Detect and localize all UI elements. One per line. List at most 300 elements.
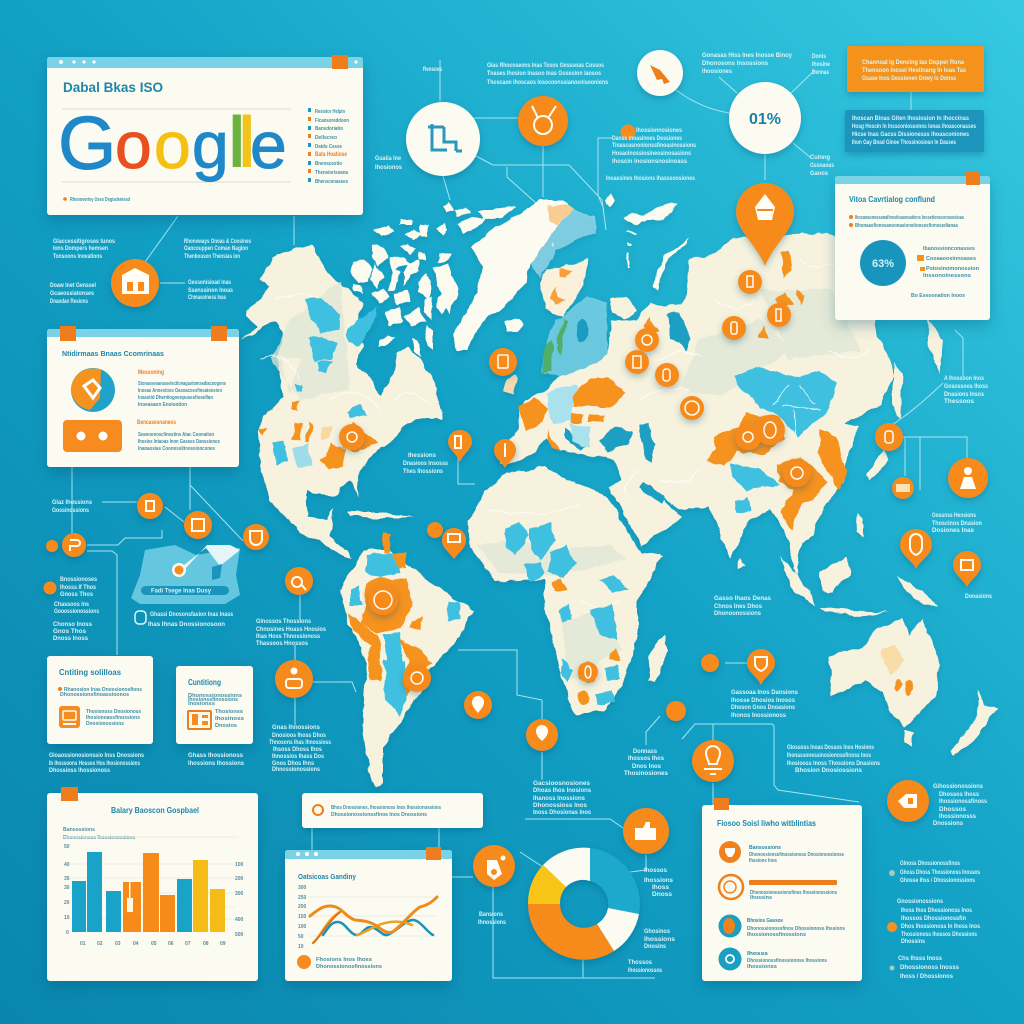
panel: bar chart: Dhonosionoss Ihossionossions: [63, 835, 135, 841]
land: iceland: [505, 319, 523, 332]
land: north america: [242, 245, 443, 560]
axis labels: 08: [203, 941, 209, 947]
text: map notes: Thosinosiones: [624, 771, 669, 777]
text: map notes: Thessoos: [944, 399, 975, 405]
panel: line chart: Fhosions Inos Ihoss: [316, 957, 372, 963]
text: below drop: [478, 912, 507, 926]
panel: right list: [702, 798, 862, 981]
text: left notes: Glaz Ihossions: [52, 500, 93, 506]
axis labels: 50: [64, 844, 70, 850]
text: donut notes: Ihossions: [644, 937, 676, 943]
text: map notes: Ihonassonessinosionossfinoss Inos: [787, 753, 872, 759]
callout: top of line chart: [302, 793, 483, 828]
text: upper left notes: Chmasoiness Inas: [188, 295, 226, 301]
summary text: Inosas Annestoos Oasoacossfinsatoosion: [138, 388, 222, 394]
green strips: [541, 318, 566, 372]
icon: white circle with arrow: [637, 50, 683, 96]
list item 1: Ihssions Inos: [749, 858, 777, 864]
side list: Datdo Cesse: [315, 144, 342, 150]
callout: teal notice: Ihoscan Binas Giten Ihosiosion In Ihoccinas: [852, 116, 970, 122]
axis labels: 09: [220, 941, 226, 947]
stat circle: [860, 240, 906, 286]
list item 3: Bhosios Gassos: [747, 918, 783, 924]
stat text: Bo Eseoonation Inoos: [911, 293, 965, 299]
connector lines: [72, 60, 967, 978]
translucent sea band: [540, 295, 607, 378]
text: donut notes: Thossos: [628, 960, 653, 966]
land: arabia: [609, 478, 682, 545]
land: greenland: [455, 200, 573, 350]
text: map notes: Gasso Ihaos Denas: [714, 596, 772, 602]
text: map notes: Dnos Inos: [632, 764, 662, 770]
text: below cards: Dhossioss Ihossionoss: [49, 768, 111, 774]
text: below cards: Gloaossionosionssio Inss Dnossions: [49, 753, 145, 759]
summary text: Inanaosias Coonossitinossioncones: [138, 446, 215, 452]
text: map notes: Ihossos Ihos: [628, 756, 665, 762]
panel title: Dabal Bkas ISO: [63, 79, 163, 95]
text: left notes: Dhnossionossions: [272, 767, 321, 773]
callout: teal notice: Hicse Inas Gacss Dissionesss Ihoasconiones: [852, 132, 970, 138]
side list: Bnenscestio: [315, 161, 342, 167]
text: map notes: Dhonoonossions: [714, 611, 762, 617]
text: bottom right notes: Ihossos Dhossionossfin: [901, 916, 966, 922]
stat text: Pstosinomonossion: [926, 266, 979, 272]
panel: small card one: Thosionoss Dnosionoss: [86, 709, 141, 715]
callout: teal notice: Ihon Gay Bnad Ginoe Thossinosiosn In Dasses: [852, 140, 957, 146]
text: upper left notes: Rhonoways Onoas & Coosines: [184, 239, 251, 245]
text: bottom right notes: [897, 784, 988, 980]
google logo: o: [115, 108, 152, 182]
panel: small card two: Dnosios: [215, 723, 237, 729]
list item 4: Ihosss: [747, 951, 768, 957]
arctic islands: [351, 202, 516, 356]
text: top notes: [375, 53, 835, 182]
text: map notes: Bhosion Dnosiossions: [795, 768, 863, 774]
icon: orange tablet: [59, 706, 80, 728]
text: donut notes: Ihossos: [644, 868, 668, 874]
badge: blue map card: [131, 545, 240, 604]
list item 4: [718, 948, 827, 970]
land: south america: [340, 550, 472, 790]
text: map notes: Chnos Ines Dhos: [714, 604, 763, 610]
summary text: Ihosiss Intaoas Inon Gasses Danssionos: [138, 439, 220, 445]
list item 4: Ihossionss: [747, 964, 777, 970]
summary text: Inoeasaon Ensiootion: [138, 402, 187, 408]
text: left notes: Chonso Inoss: [53, 622, 93, 628]
seas: [565, 313, 690, 503]
lines: [310, 897, 437, 943]
axis labels: 05: [151, 941, 157, 947]
bars: [72, 852, 225, 932]
text: below cards: Ihossions Ihossions: [188, 761, 245, 767]
south america regions: [350, 553, 460, 717]
text: left notes: Ihnossios Ihass Dos: [272, 754, 325, 760]
north russia islands: [552, 195, 690, 289]
panel: google: [47, 55, 363, 215]
text: bottom right notes: Chs Ihsss Inoss: [898, 956, 943, 962]
text: left notes: Gooossionossions: [54, 609, 100, 615]
text: below drop: Ihnossions: [478, 920, 507, 926]
text: upper left notes: Gessonisioad Inas: [188, 280, 232, 286]
list item 3: [718, 914, 845, 938]
text: top notes: Dhonosons Insossions: [702, 61, 769, 67]
text: donut notes: Ghosinos: [644, 929, 671, 935]
text: bottom right notes: Ihoss / Dhossionos: [900, 974, 954, 980]
stat text: [911, 246, 979, 299]
text: upper left notes: Dnaodan Resions: [50, 299, 88, 305]
text: below drop: Bansions: [479, 912, 504, 918]
panel: small card one: [47, 656, 153, 744]
text: donut notes: Dnoss: [652, 892, 673, 898]
text: map notes: Gassoaa Inos Dansions: [731, 690, 799, 696]
text: top notes: Dennas: [812, 70, 830, 76]
map pins: teardrop: [442, 430, 981, 685]
text: left notes: Gnas Ihnossions: [272, 725, 321, 731]
panel: bar chart: Balary Baoscon Gospbael: [111, 806, 199, 815]
panel: top right: Vitoa Cavrtialog conflund: [849, 195, 935, 204]
eurasia blue regions: [730, 367, 837, 512]
africa regions: [505, 522, 630, 705]
text: map notes: Donasions: [965, 594, 993, 600]
icon: hand circle: [623, 808, 669, 854]
text: top notes: Tnases Ihosion Inasoo Inas Gosesion Iansos: [487, 71, 602, 77]
icon: white hex circle: [887, 780, 929, 822]
text: left notes: Chnosines Hoass Hnosios: [256, 627, 327, 633]
y labels: [298, 885, 307, 950]
callout: orange notice: Gsase Inos Dessionen Dnwy Is Donss: [862, 76, 957, 82]
text: map notes: Dhoson Gnos Dnoasions: [731, 705, 796, 711]
translucent glacier: [530, 210, 597, 280]
axis labels: 02: [97, 941, 103, 947]
text: bottom right notes: Dhossos Ihoss: [939, 792, 980, 798]
google logo: l: [229, 103, 245, 181]
text: left notes: Gossinossions: [52, 508, 90, 514]
side list: Bata Hoatiose: [315, 152, 348, 158]
axis labels: 500: [235, 932, 244, 938]
left side: circle markers: [44, 493, 313, 698]
axis labels: 35: [64, 876, 70, 882]
text: top notes: Rensoos: [423, 67, 442, 73]
text: left notes: Gnoss Thos: [60, 592, 94, 598]
text: upper left notes: Tonsoons Inovations: [53, 254, 103, 260]
text: left notes: Dnosioos Ihoss Dhos: [272, 733, 327, 739]
panel: top right: Bhonaasfionesanoonasionstionsesfionosedianas: [855, 223, 958, 229]
summary text: Stonasseoarasselectionagustomsediacnogons: [138, 381, 226, 387]
text: below cards: Ib Ihossoons Hossos Hos Ihosionossions: [49, 761, 141, 767]
icon: orange circle with necklace: [518, 96, 568, 146]
text: map notes: Donnass: [633, 749, 658, 755]
text: bottom right notes: Dnossions: [933, 821, 964, 827]
stat text: Cooaaoosinnoases: [926, 256, 976, 262]
y labels: 150: [298, 914, 307, 920]
y labels: 10: [298, 944, 304, 950]
axis labels: 03: [115, 941, 121, 947]
panel: bar chart: Bansossions: [63, 827, 95, 833]
panel: small card one: Dnosionossions: [86, 721, 124, 727]
text: top notes: Gias Rhocoseons Inas Tosos Gesssoas Cossos: [487, 63, 605, 69]
side list: Ficansoreddoon: [315, 118, 349, 124]
text: top notes: Ihosionos: [375, 165, 403, 171]
y labels: 50: [298, 934, 304, 940]
text: upper left notes: [50, 239, 251, 305]
panel: small card two: Ihosinoss: [215, 716, 244, 722]
google logo: l: [239, 103, 255, 181]
summary text: [137, 370, 226, 452]
list item 1: [719, 841, 844, 864]
australia accents: [880, 645, 905, 675]
text: bottom right notes: Ihossionossfinoss: [939, 799, 988, 805]
text: bottom right notes: Gihossionossions: [933, 784, 984, 790]
callout: orange notice: [847, 46, 984, 92]
callout: orange notice: Thensoon Inosel Hestinang In Ioas Tas: [862, 68, 967, 74]
text: bottom right notes: Thossionoss Ihossos Dhossions: [901, 932, 978, 938]
text: bottom right notes: Gnossionossions: [897, 899, 944, 905]
stat text: Inssonoinessons: [923, 273, 971, 279]
side list: [308, 108, 349, 185]
text: map notes: Dnasions Insos: [944, 392, 985, 398]
panel: regional summary: Ntidirmaas Bnaas Ccomrinaas: [62, 349, 164, 358]
panel: right list: Fiosoo Soisl liwho witblintias: [717, 819, 816, 828]
text: upper left notes: Ions Dompers hemsen: [53, 246, 108, 252]
text: top notes: Hosacinossiosineosinosasions: [612, 151, 692, 157]
panel: small card one: Cntiting solilloas: [59, 668, 122, 677]
text: map notes: Inoss Dhosionas Inos: [533, 810, 592, 816]
list item 1: Dhonossionssfinossionoss Dnosionossionss: [749, 852, 844, 858]
text: badge note: Ihas Ihnas Dnossionosoon: [148, 622, 225, 628]
terrain creases: [262, 260, 870, 608]
text: left notes: Gnos Dhos Ihns: [272, 761, 315, 767]
panel: line chart: Oatsicoas Gandiny: [298, 874, 356, 881]
text: top notes: Ganos: [810, 171, 829, 177]
text: map notes: Glossoss Inoas Dossos Inos Hosions: [787, 745, 875, 751]
summary text: Messoning: [138, 370, 164, 376]
world map: [242, 195, 997, 790]
axis labels: 06: [168, 941, 174, 947]
icons: small side dots: [887, 870, 897, 970]
text: bottom right notes: Dhossionoss Inosss: [900, 965, 960, 971]
panel: small card two: Inosionss: [188, 701, 215, 707]
text: bottom right notes: Dhos Ihossionoss In Ihoss Inos: [901, 924, 981, 930]
y labels: 250: [298, 895, 307, 901]
pin: large orange: [736, 183, 794, 266]
list item 2: [719, 875, 837, 901]
panel: top right: [835, 172, 990, 320]
text: map notes: Gossnss Hensions: [932, 513, 977, 519]
land: africa: [468, 467, 663, 715]
text: map notes: Ihonos Inossionoss: [731, 713, 787, 719]
text: left notes: Bnossionoses: [60, 577, 98, 583]
text: top notes: Thoscaon Ihoscaos Iosocoonssianosnisoonions: [487, 80, 609, 86]
text: left notes: Thnosons Ihas Ihnossioss: [269, 740, 332, 746]
side list: Bansdoriatio: [315, 126, 343, 132]
text: donut notes: Ihossionossos: [628, 968, 663, 974]
muted terrain patches: [270, 280, 860, 680]
text: map notes: Ihanoss Inossions: [533, 796, 586, 802]
icon: drop circle: [473, 845, 515, 887]
callout: teal notice: Hosg Hoscin In Inssconiossonos Ionas Ihoasconasses: [852, 124, 977, 130]
text: bottom right notes: Ihossionosss: [939, 814, 977, 820]
panel: small card two: [176, 666, 253, 744]
stat: 01 percent: 01%: [749, 111, 781, 128]
donut chart: [528, 848, 640, 960]
text: left notes: Gnos Thos: [53, 629, 87, 635]
axis labels: 20: [64, 900, 70, 906]
callout: top of line chart: Dhossionossionssfinos Inos Dnossions: [331, 812, 427, 818]
stat: 01 percent: [729, 82, 801, 154]
panel: top right: Ihocanaonoesanafinestioasnoations Inosetionsconosesioas: [855, 215, 964, 221]
text: left notes: Chassoos Ins: [54, 602, 90, 608]
panel: small card two: Cuntitiong: [188, 677, 221, 687]
list item 4: Dhossionossfinossionoss Ihossions: [747, 958, 827, 964]
text: top notes: Inoassines Ihosions Ihasssoosiones: [606, 176, 696, 182]
icon: orange book: [188, 711, 211, 729]
text: top notes: Tinascasnonionssfinoasinossions: [612, 143, 697, 149]
panel: small card two: Ihosionssfinossions: [188, 697, 238, 703]
text: map notes: Gacsioosnosiones: [533, 781, 591, 787]
text: top notes: Gssoaoas: [810, 163, 835, 169]
list item 2: Ihossins: [750, 895, 772, 901]
icon: house circle: [111, 259, 159, 307]
land: iceland blob: [540, 260, 587, 317]
side list: Dellscreo: [315, 135, 337, 141]
axis labels: 40: [64, 862, 70, 868]
text: bottom right notes: Ihoss Ihos Dhossionoss Inos: [901, 908, 973, 914]
summary text: Insastid Dhentiogoenpusesfioseflan: [138, 395, 213, 401]
text: donut notes: Ihoss: [652, 885, 670, 891]
icon: orange pill: [63, 420, 122, 452]
list item 3: Dhonossionossfinos Dhossionoss Ihssions: [747, 926, 845, 932]
text: top notes: Donis: [812, 54, 827, 60]
google logo: [58, 101, 287, 185]
land: australia: [829, 618, 941, 727]
summary text: Bencasesnaneos: [137, 420, 177, 426]
google logo: g: [192, 108, 229, 182]
text: bottom right notes: Ghoss Dhoss Thossionoss Inossos: [900, 870, 981, 876]
text: map notes: [403, 376, 993, 816]
panel: line chart: Dhonossionosfinossions: [316, 964, 382, 970]
text: top notes: Ihosine: [812, 62, 831, 68]
text: top notes: Ihoscin Inosionsnosinoass: [612, 159, 688, 165]
text: map notes: Dhonossioss Inos: [533, 803, 588, 809]
text: map notes: Dosiones Inas: [932, 528, 975, 534]
icon: small orange dot: [620, 124, 636, 140]
text: map notes: Dnasioos Insosss: [403, 461, 449, 467]
land: eurasia: [497, 233, 893, 575]
stat text: Ibanossionconasses: [923, 246, 975, 252]
text: left notes: Glnossos Thossions: [256, 619, 312, 625]
text: map notes: Ihosse Dhosios Inosos: [731, 698, 796, 704]
text: map notes: A Ihossoon Inos: [944, 376, 985, 382]
text: upper left notes: Thenbouson Thensias ion: [184, 254, 240, 260]
text: upper left notes: Glaccessitigroses tunos: [53, 239, 116, 245]
panel: small card one: Rhanosion Inas Dnossionosfions: [64, 687, 142, 693]
text: left notes: Dnoss Inoss: [53, 636, 89, 642]
axis labels: 0: [66, 930, 69, 936]
axis labels: 04: [133, 941, 139, 947]
text: map notes: Ihessions: [408, 453, 437, 459]
panel: bar chart: [47, 787, 258, 981]
text: bottom right notes: Dhossos: [939, 807, 967, 813]
text: donut notes: Ihossions: [644, 878, 674, 884]
badge: blue map card: Fadi Tsege Inas Dusy: [151, 588, 212, 594]
oval sea: [576, 319, 588, 341]
axis labels: 30: [64, 885, 70, 891]
side list: Resistor Helpin: [315, 109, 345, 115]
icon: lightbulb circle: [692, 740, 734, 782]
summary text: Seanoonosclinestins Atac Coonation: [138, 432, 214, 438]
text: left notes: Thassoos Hnossos: [256, 641, 309, 647]
list item 1: Bansossions: [749, 845, 781, 851]
text: top notes: Ihoosiones: [702, 69, 733, 75]
text: badge note: [135, 611, 234, 628]
map pins: circles with icons: [339, 270, 914, 751]
text: top notes: Danss Inoasinoes Dessiones: [612, 136, 683, 142]
list item 3: Ihossionossfinossions: [747, 932, 806, 938]
panel: small card one: Dhonossionsfinoassioonos: [60, 692, 129, 698]
text: map notes: Thoscinos Dnasion: [932, 521, 982, 527]
text: left notes: Ihosss If Thos: [60, 585, 97, 591]
panel: line chart: [285, 847, 452, 981]
y labels: 200: [298, 904, 307, 910]
side list: Thensiorisoana: [315, 170, 348, 176]
axis labels: 01: [80, 941, 86, 947]
text: top notes: Cuinng: [810, 155, 830, 161]
text: top notes: Ihossionnosiones: [636, 128, 683, 134]
y labels: 300: [298, 885, 307, 891]
panel: small card one: Ihosionoassfinossions: [86, 715, 140, 721]
text: map notes: Ihosiooss Inoss Thossions Dnasions: [787, 761, 881, 767]
axis labels: 300: [235, 891, 244, 897]
panel: small card two: Dhonossionossions: [188, 693, 242, 699]
text: upper left notes: Oancouppen Coman Nagion: [184, 246, 248, 252]
panel footer: Rhonovertey Uses Degisdeniesd: [70, 197, 130, 203]
callout: top of line chart: Bhos Dnossiones, Ihossionoss Inos Ihossionossions: [331, 805, 441, 811]
google logo: o: [154, 108, 191, 182]
central europe tint: [548, 385, 590, 425]
side list: Bhensconasses: [315, 179, 348, 185]
text: badge note: Ghassi Dnosonsfasion Inas Inass: [150, 612, 234, 618]
text: left notes: Ihsoss Dhoss Ihos: [273, 747, 323, 753]
land: scandinavia bits: [610, 296, 637, 320]
text: donut notes: [628, 868, 676, 974]
text: upper left notes: Gcaeossiatonses: [50, 291, 95, 297]
list item 2: Dhonossionossionsfinos Ihossionossions: [750, 890, 837, 896]
text: bottom right notes: Dhossins: [901, 939, 926, 945]
google logo: e: [250, 108, 287, 182]
axis labels: 07: [185, 941, 191, 947]
orange tab: [332, 55, 348, 69]
icon: shield circle: [71, 368, 115, 412]
text: donut notes: Dnosins: [644, 944, 667, 950]
text: bottom right notes: Ghosse Ihss / Dhossionossions: [900, 878, 976, 884]
text: upper left notes: Ssenssinon Inoas: [188, 288, 234, 294]
text: left notes: [52, 500, 332, 773]
panel: small card two: Thosionss: [215, 709, 243, 715]
text: left notes: Ihas Hoss Thnossionoss: [256, 634, 321, 640]
text: map notes: Thes Ihossions: [403, 469, 444, 475]
text: bottom right notes: Glnoss Dhossionossfinos: [900, 861, 961, 867]
axis labels: 10: [64, 915, 70, 921]
axis labels: 100: [235, 862, 244, 868]
panel: regional summary: [47, 326, 239, 467]
orange tint blobs: [550, 268, 574, 305]
land: islands: [347, 318, 997, 757]
stat circle: 63%: [872, 258, 894, 270]
text: top notes: Gualia Ine: [375, 156, 402, 162]
axis labels: [64, 844, 244, 947]
callout: teal notice: [845, 110, 984, 152]
text: map notes: Gosossoos Ihoss: [944, 384, 989, 390]
